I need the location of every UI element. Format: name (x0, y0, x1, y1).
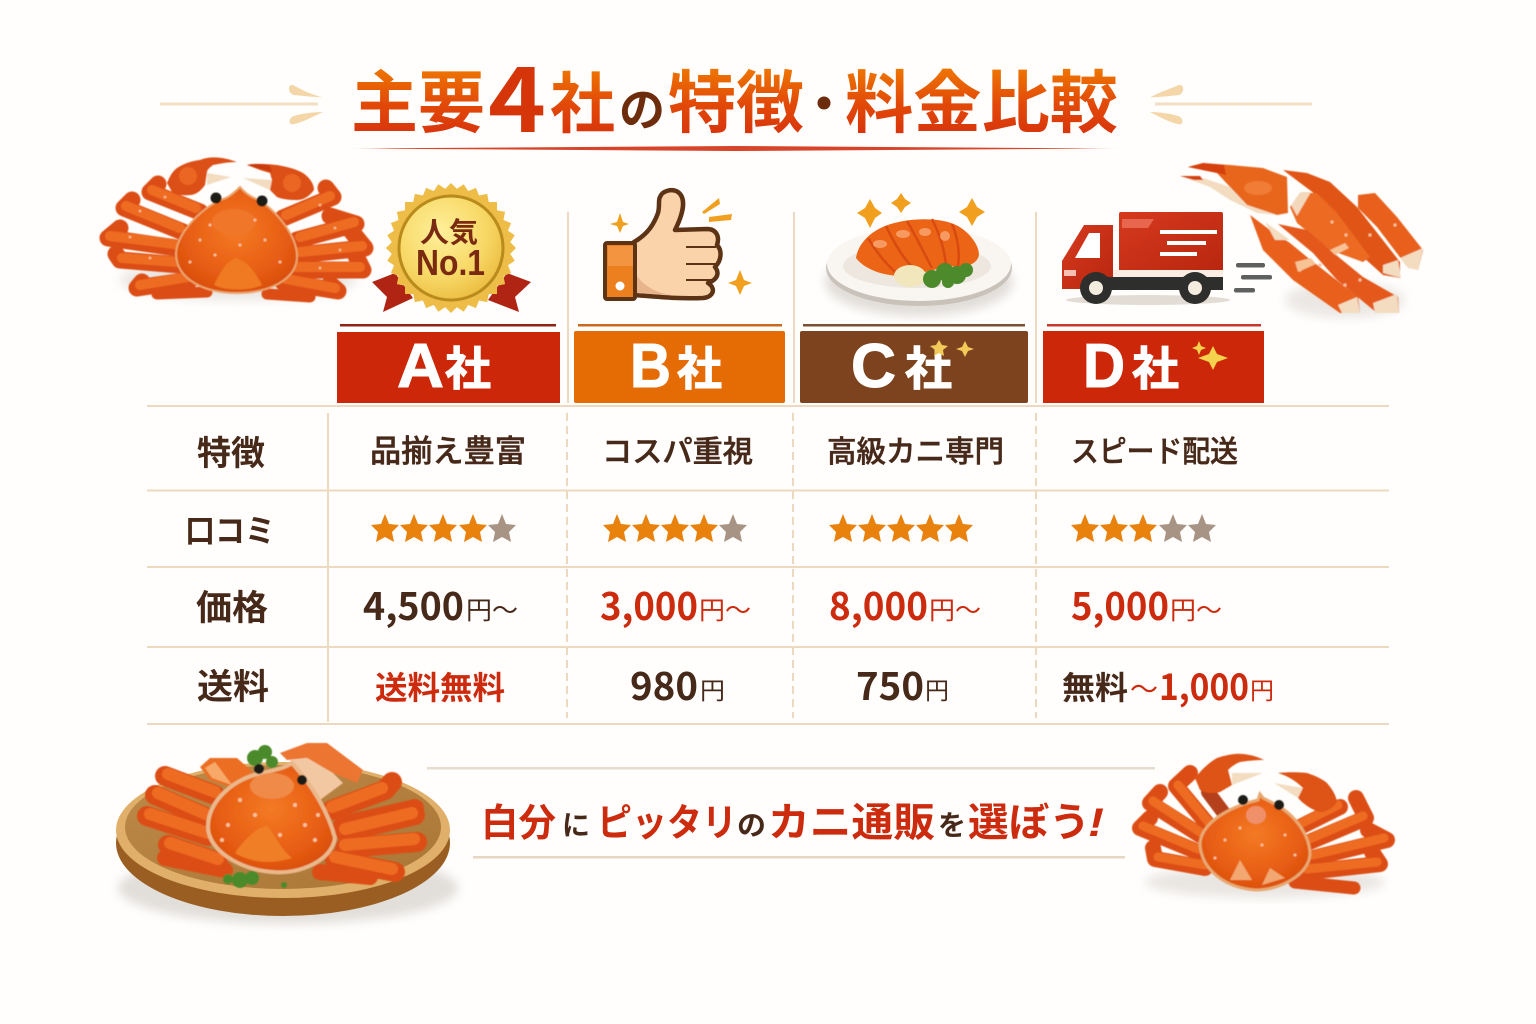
table header: D社: D (1083, 332, 1125, 401)
row: 価格: 価格 (196, 580, 268, 631)
table header: B社: B (630, 332, 671, 401)
row: 口コミ with star ratings: 口コミ (185, 506, 275, 552)
table header: C社: C (851, 332, 896, 401)
icon: No.1 medal: No.1 (416, 242, 485, 283)
bottom message: 選ぼう (968, 790, 1090, 848)
row: 送料: 送料 (197, 659, 269, 710)
crab on wooden plate (116, 743, 458, 924)
table header: B社 (574, 324, 785, 403)
row: 送料: 円 (925, 671, 949, 706)
icon: thumbs up (605, 190, 752, 299)
icon: No.1 medal: 人気 (420, 211, 478, 251)
title: 4 (488, 31, 546, 158)
table header: A社 (337, 324, 560, 403)
table header: D社 (1043, 324, 1264, 403)
bottom message: 白分 (481, 792, 556, 847)
table header: C社: 社 (905, 333, 952, 399)
bottom message: の (737, 804, 766, 844)
row: 特徴: コスパ重視 (602, 427, 753, 471)
leg rear (1283, 170, 1400, 278)
row: 送料: 円 (700, 671, 725, 706)
leg front upper (1290, 193, 1370, 262)
row: 特徴: 品揃え豊富 (370, 426, 526, 471)
row: 価格: 円〜 (466, 591, 518, 627)
row: 送料: 円 (1250, 671, 1274, 706)
row: 価格: 円〜 (699, 591, 751, 627)
bottom message: ピッタリ (597, 792, 737, 847)
stars: A社 4 of 5 (371, 514, 516, 542)
row: 送料: 980 (630, 656, 698, 711)
table grid (147, 406, 1389, 724)
row: 送料 (197, 656, 1274, 711)
table header: A社: 社 (445, 333, 491, 399)
row: 特徴: 特徴 (197, 426, 265, 475)
table header: A社: A (397, 332, 444, 401)
row: 送料: 無料 (1062, 663, 1128, 709)
leg far right (1358, 193, 1423, 270)
row: 送料: 〜 (1130, 668, 1158, 708)
stars: C社 5 of 5 (829, 514, 973, 542)
stars: B社 4 of 5 (603, 514, 747, 542)
table header: D社: 社 (1132, 333, 1179, 399)
row: 価格 (196, 576, 1222, 631)
bottom message top rule (427, 767, 1155, 770)
row: 特徴 (197, 426, 1238, 475)
row: 価格: 3,000 (600, 576, 698, 631)
row: 価格: 円〜 (929, 591, 981, 627)
row: 口コミ with star ratings (185, 506, 1216, 552)
bottom message: を (938, 804, 966, 844)
stars: D社 3 of 5 (1071, 514, 1216, 542)
title: 料金比較 (845, 48, 1118, 147)
title: の (619, 74, 665, 140)
title underline (348, 146, 1122, 151)
row: 価格: 円〜 (1170, 591, 1222, 627)
title (351, 31, 1118, 158)
title: 特徴 (668, 48, 804, 147)
row: 送料: 750 (856, 656, 924, 711)
title: 社 (550, 51, 615, 147)
icon: delivery truck (1062, 212, 1272, 305)
row: 価格: 4,500 (363, 576, 464, 631)
row: 価格: 8,000 (829, 576, 928, 631)
row: 送料: 1,000 (1159, 659, 1249, 711)
bottom message underline (473, 856, 1125, 858)
title left ornament (160, 85, 323, 124)
crab bottom right (1140, 754, 1387, 898)
title: 主要 (351, 48, 485, 147)
bottom message: ! (1088, 801, 1104, 845)
crab legs top right (1180, 163, 1423, 318)
leg lower right (1278, 224, 1399, 313)
icon: No.1 medal (372, 183, 531, 313)
claws (167, 157, 314, 200)
row: 特徴: スピード配送 (1071, 427, 1238, 471)
title right ornament (1150, 85, 1312, 124)
bottom message: カニ通販 (768, 790, 935, 848)
row: 価格: 5,000 (1071, 576, 1169, 631)
table header: B社: 社 (677, 333, 722, 399)
row: 特徴: 高級カニ専門 (827, 427, 1004, 471)
lower claw (1250, 215, 1360, 313)
row: 送料: 送料無料 (375, 663, 505, 709)
upper claw (1188, 163, 1288, 215)
bottom message (481, 790, 1104, 848)
icon: plated crab dish (825, 193, 1013, 316)
bottom message: に (562, 804, 590, 844)
vertical column dividers, header zone (568, 212, 1036, 403)
table header: C社 (800, 324, 1028, 403)
crab top left (108, 157, 365, 300)
